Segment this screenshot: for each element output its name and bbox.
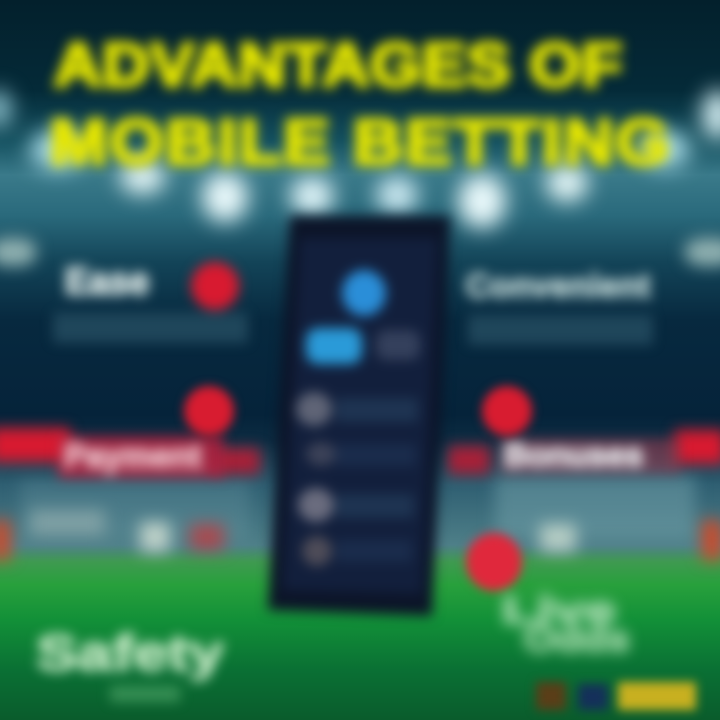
phone: [260, 206, 458, 624]
heading: top right: Convenient: [466, 267, 651, 304]
icon: red badge left: [184, 386, 234, 436]
icon: red ball: [466, 533, 522, 591]
title: [42, 31, 677, 178]
panel: top left benefit: [50, 253, 252, 346]
text block: top right: [468, 315, 653, 345]
heading: top left: Ease: [65, 261, 149, 303]
list rows: [290, 386, 420, 572]
panel: top right benefit: [458, 264, 658, 348]
bottom right text: Live: [502, 590, 616, 632]
button: grey: [376, 330, 420, 360]
bottom left text: Safety: [36, 625, 224, 681]
icon: red badge top left: [191, 262, 239, 310]
side stand text glows: [0, 228, 720, 278]
text block: top left: [53, 313, 248, 343]
bottom right text: Odds: [524, 618, 630, 659]
button: blue: [306, 328, 362, 364]
stand panels under banners: [0, 470, 720, 572]
title: MOBILE BETTING: [50, 106, 672, 178]
icon: red badge right: [482, 386, 532, 436]
icon: blue app badge: [342, 270, 386, 316]
logos bottom right: [530, 674, 704, 718]
title: ADVANTAGES OF: [54, 31, 622, 99]
red banner band: [0, 416, 720, 484]
bottom left text: [30, 624, 232, 707]
stadium floodlights: [0, 76, 720, 244]
left banner heading: Payment: [64, 437, 202, 474]
bottom right text: [494, 587, 638, 662]
